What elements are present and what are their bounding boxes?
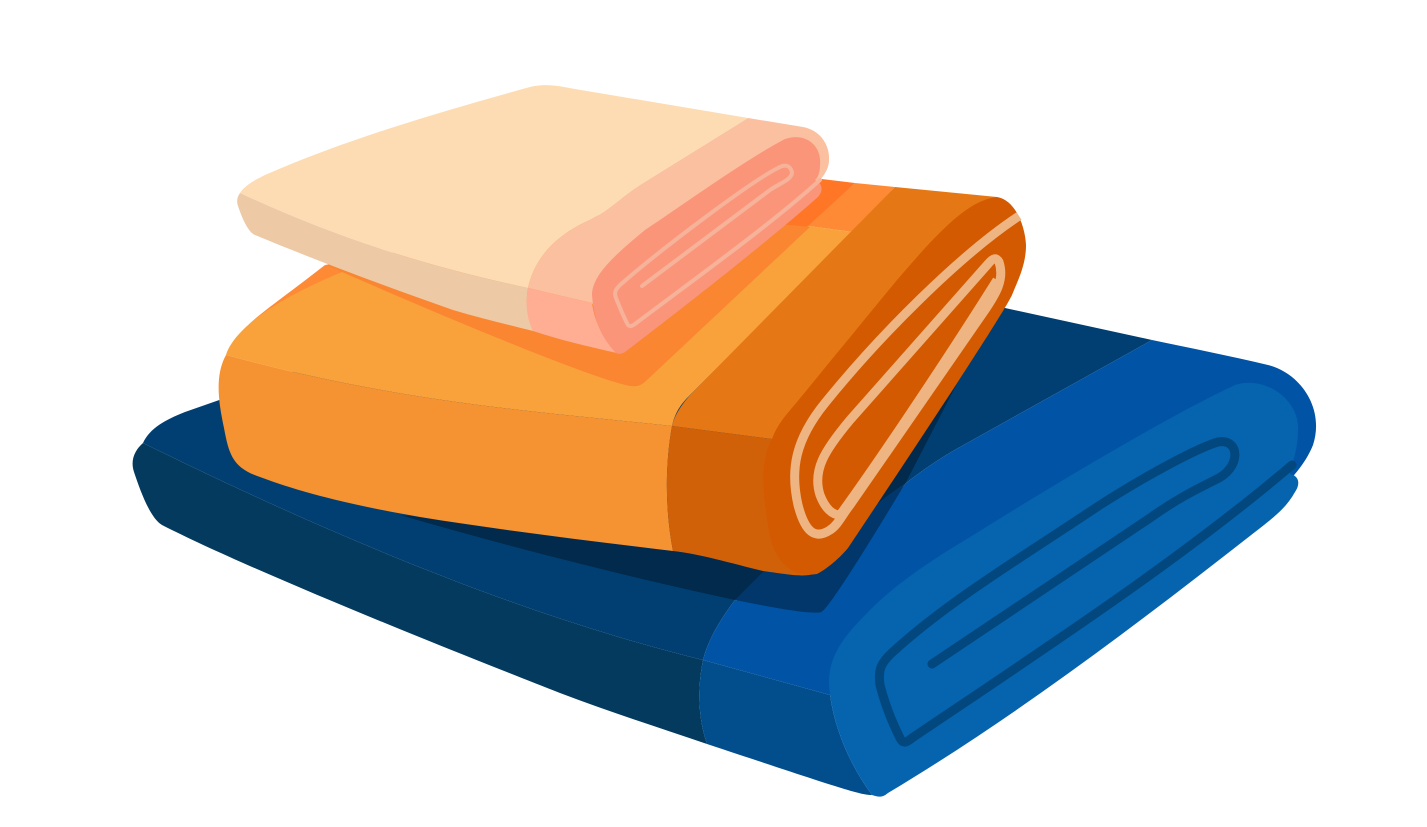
blue towel lighter band: [703, 340, 1316, 695]
peach towel roll: [592, 137, 822, 354]
blue towel roll: [829, 383, 1298, 797]
peach towel spiral line: [615, 166, 820, 326]
orange towel top surface: [226, 226, 853, 426]
blue towel spiral line: [879, 442, 1292, 742]
dark shadow sliver: [870, 345, 977, 510]
shadow cast by orange towel: [735, 484, 905, 613]
orange towel back strip: [740, 174, 855, 228]
orange towel (middle): [219, 174, 1026, 575]
orange towel spiral line: [795, 216, 1019, 534]
orange towel band: [672, 187, 1000, 440]
peach towel (top): [237, 85, 829, 354]
blue towel (bottom): [133, 308, 1316, 797]
peach towel band: [528, 118, 829, 350]
blue towel left front face: [133, 443, 707, 744]
peach towel left front face: [237, 193, 533, 331]
orange towel shaded area below peach towel: [325, 215, 810, 386]
orange towel upper edge: [230, 265, 345, 350]
peach towel right front face: [527, 288, 617, 353]
orange towel front face: [219, 355, 673, 551]
dark shadow wedge: [400, 515, 780, 600]
orange towel roll: [763, 197, 1026, 575]
orange towel right front face: [667, 426, 815, 575]
peach towel top surface: [240, 85, 748, 288]
orange towel back strip light: [808, 183, 895, 232]
blue towel right front face: [699, 660, 872, 795]
blue towel top surface: [143, 308, 1152, 660]
